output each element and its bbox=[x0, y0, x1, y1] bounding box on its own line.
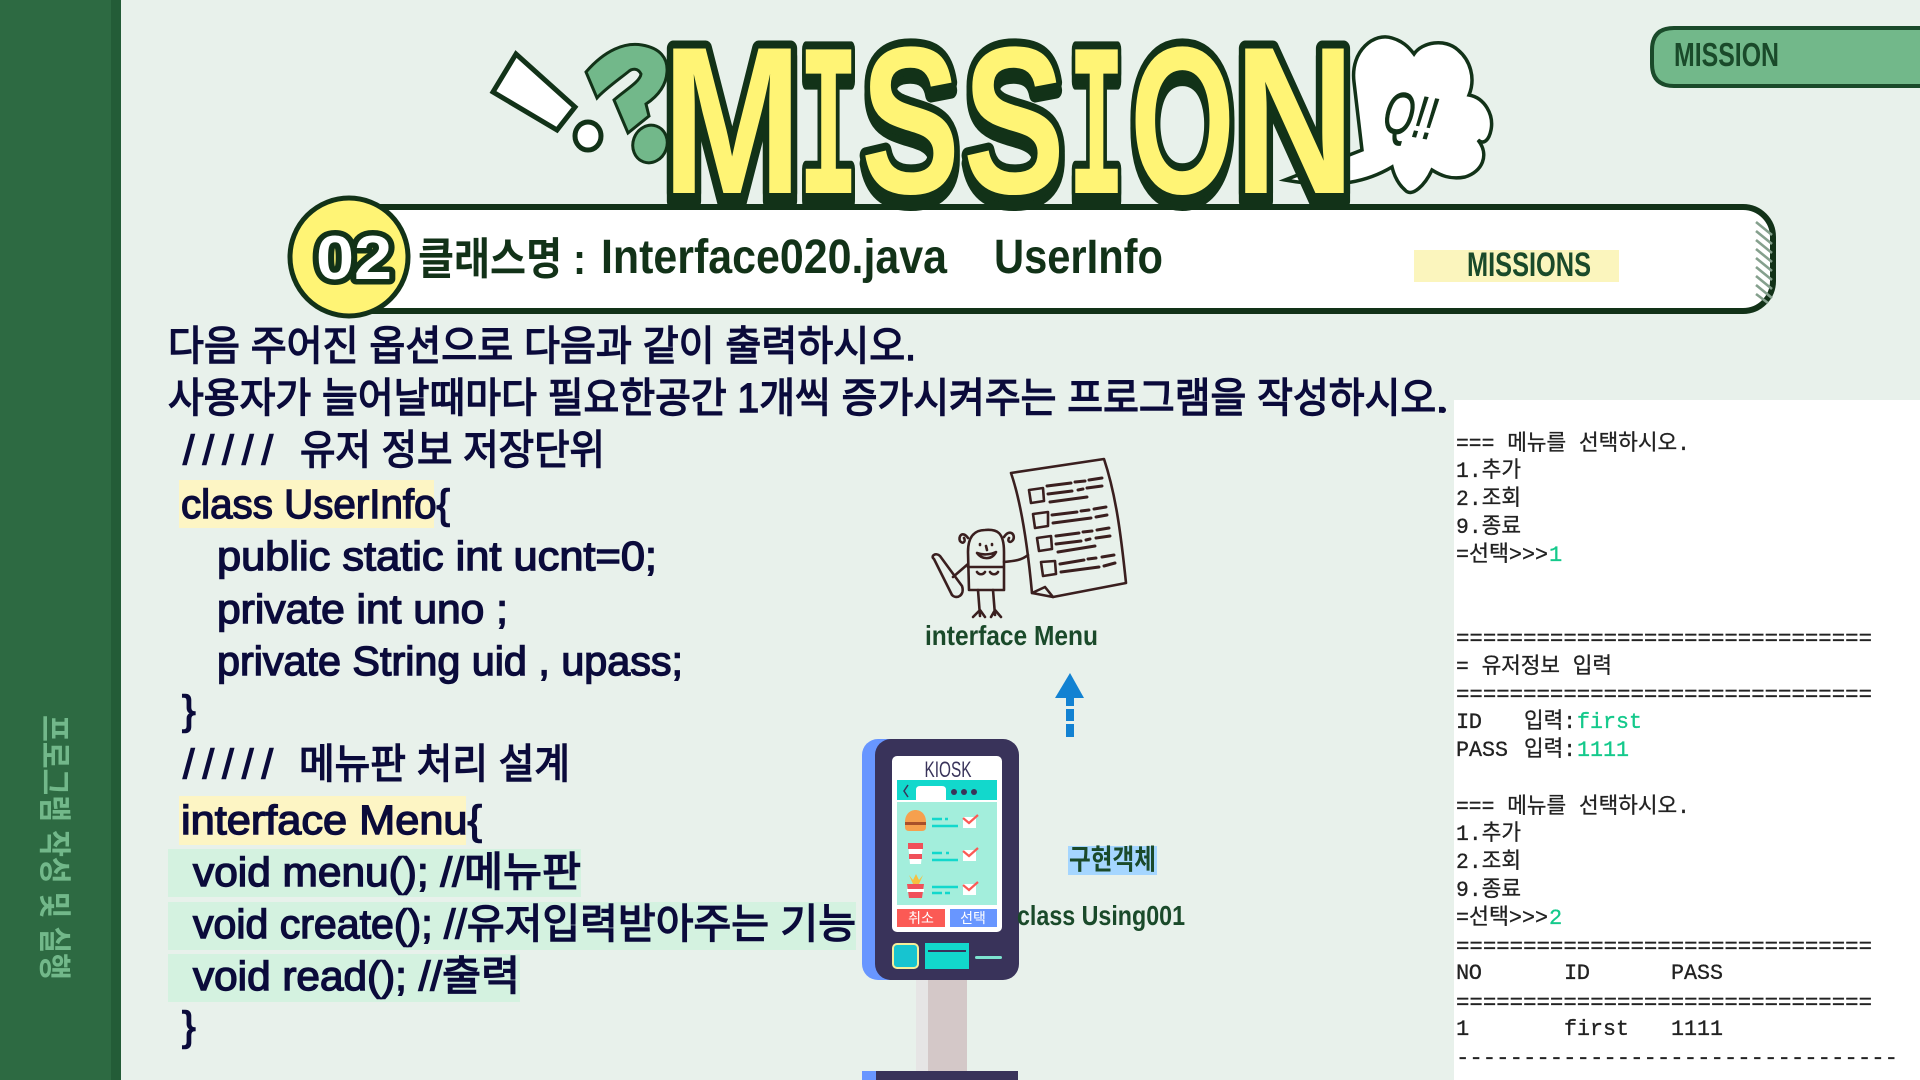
panel: left sidebar bbox=[0, 0, 121, 1080]
panel: console output: === 메뉴를 선택하시오. bbox=[1456, 431, 1690, 457]
panel: console output: ID bbox=[1456, 710, 1482, 735]
panel: console output: 2.조회 bbox=[1456, 849, 1521, 875]
panel: console output: first bbox=[1564, 1017, 1629, 1042]
title: MISSION: S bbox=[963, 3, 1065, 238]
text block: mission description: 다음 주어진 옵션으로 다음과 같이 출력하시오. bbox=[168, 323, 916, 369]
panel: console output: 입력: bbox=[1524, 709, 1576, 735]
title: MISSION bbox=[662, 3, 1355, 259]
code block: Menu interface: interface Menu{ bbox=[181, 797, 482, 843]
panel: console output: === 메뉴를 선택하시오. bbox=[1456, 794, 1690, 820]
panel: console output: ID bbox=[1564, 961, 1590, 986]
title: MISSION: N bbox=[1234, 3, 1355, 238]
title: MISSION: M bbox=[662, 3, 802, 238]
panel: console output: 1.추가 bbox=[1456, 458, 1521, 484]
code block: Menu interface: void create(); //유저입력받아주는 기능 bbox=[193, 901, 856, 947]
icon: speech bubble with Q!! bbox=[1285, 37, 1492, 192]
code block: Menu interface: } bbox=[182, 1003, 196, 1049]
panel: console output: first bbox=[1577, 710, 1642, 735]
banner title text: Interface020.java bbox=[601, 231, 947, 284]
arrow: implementation up arrow bbox=[1055, 673, 1084, 737]
panel: console output: =============================== bbox=[1456, 991, 1872, 1016]
label: interface Menu: interface Menu bbox=[925, 620, 1098, 651]
label: MISSIONS highlight bbox=[1414, 246, 1619, 284]
panel: console output: =선택>>> bbox=[1456, 542, 1548, 568]
tag: top right MISSION: MISSION bbox=[1674, 36, 1779, 73]
panel: console output: 1111 bbox=[1671, 1017, 1723, 1042]
banner title text: 클래스명 : bbox=[418, 235, 586, 284]
text block: mission description: 사용자가 늘어날때마다 필요한공간 1개씩 증가시켜주는 프로그램을 작성하시오. bbox=[168, 375, 1447, 421]
icon: kiosk: 선택 bbox=[960, 910, 986, 926]
code block: Menu interface bbox=[168, 741, 856, 1049]
panel: console output: 9.종료 bbox=[1456, 878, 1521, 903]
hatch at banner end bbox=[1756, 222, 1772, 303]
icon: exclamation mark bbox=[493, 54, 601, 150]
label: MISSIONS highlight: MISSIONS bbox=[1467, 246, 1591, 284]
code block: Menu interface: void read(); //출력 bbox=[193, 953, 520, 999]
badge: number 02 bbox=[290, 198, 408, 316]
icon: kiosk bbox=[862, 739, 1019, 1080]
panel: console output: 1 bbox=[1549, 543, 1562, 568]
title: MISSION: I bbox=[1068, 13, 1125, 259]
panel: console output: 1.추가 bbox=[1456, 821, 1521, 847]
text block: mission description bbox=[168, 323, 1447, 421]
code block: UserInfo class: class UserInfo{ bbox=[181, 481, 450, 527]
label: class Using001: class Using001 bbox=[1017, 900, 1185, 931]
panel: console output: =============================== bbox=[1456, 627, 1872, 652]
icon: kiosk: 취소 bbox=[908, 910, 934, 926]
badge: number 02: 02 bbox=[316, 224, 392, 293]
panel: console output: 2.조회 bbox=[1456, 486, 1521, 512]
code block: Menu interface: 메뉴판 처리 설계 bbox=[299, 741, 570, 787]
sidebar vertical label: 프로그램 작성 및 실행 bbox=[36, 715, 73, 980]
code block: UserInfo class: } bbox=[182, 687, 196, 733]
code block: UserInfo class: private String uid , upass; bbox=[217, 638, 683, 684]
panel: console output: 입력: bbox=[1524, 737, 1576, 763]
panel: console output: =선택>>> bbox=[1456, 905, 1548, 931]
panel: console output: PASS bbox=[1456, 738, 1508, 763]
icon: speech bubble with Q!!: Q!! bbox=[1379, 78, 1442, 153]
panel: console output: 1111 bbox=[1577, 738, 1629, 763]
code block: Menu interface: void menu(); //메뉴판 bbox=[193, 849, 581, 895]
panel: console output: =============================== bbox=[1456, 935, 1872, 960]
panel: console output: PASS bbox=[1671, 961, 1723, 986]
code block: UserInfo class: private int uno ; bbox=[217, 586, 508, 632]
panel: console output: --------------------------------- bbox=[1456, 1046, 1898, 1071]
label: implementation object: 구현객체 bbox=[1069, 844, 1156, 875]
panel: console output: = 유저정보 입력 bbox=[1456, 654, 1612, 680]
panel: console output: 2 bbox=[1549, 906, 1562, 931]
icon: girl holding checklist bbox=[933, 459, 1126, 617]
panel: class name banner bbox=[343, 207, 1773, 311]
title: MISSION: O bbox=[1130, 3, 1235, 238]
code block: UserInfo class bbox=[179, 427, 683, 733]
banner title text: UserInfo bbox=[994, 231, 1163, 284]
icon: question mark bbox=[586, 44, 672, 168]
panel: console output: NO bbox=[1456, 961, 1482, 986]
panel: console output: 9.종료 bbox=[1456, 515, 1521, 540]
panel: console output: 1 bbox=[1456, 1017, 1469, 1042]
title: MISSION: S bbox=[861, 3, 960, 238]
code block: UserInfo class: public static int ucnt=0; bbox=[217, 533, 657, 579]
code block: UserInfo class: ///// bbox=[183, 427, 274, 473]
code block: UserInfo class: 유저 정보 저장단위 bbox=[300, 427, 605, 473]
code block: Menu interface: ///// bbox=[183, 741, 274, 787]
banner title text bbox=[418, 231, 1163, 284]
panel: console output bbox=[1440, 400, 1920, 1080]
panel: console output: =============================== bbox=[1456, 683, 1872, 708]
tag: top right MISSION bbox=[1652, 28, 1920, 86]
title: MISSION: I bbox=[798, 13, 859, 259]
icon: kiosk: KIOSK bbox=[924, 757, 972, 782]
